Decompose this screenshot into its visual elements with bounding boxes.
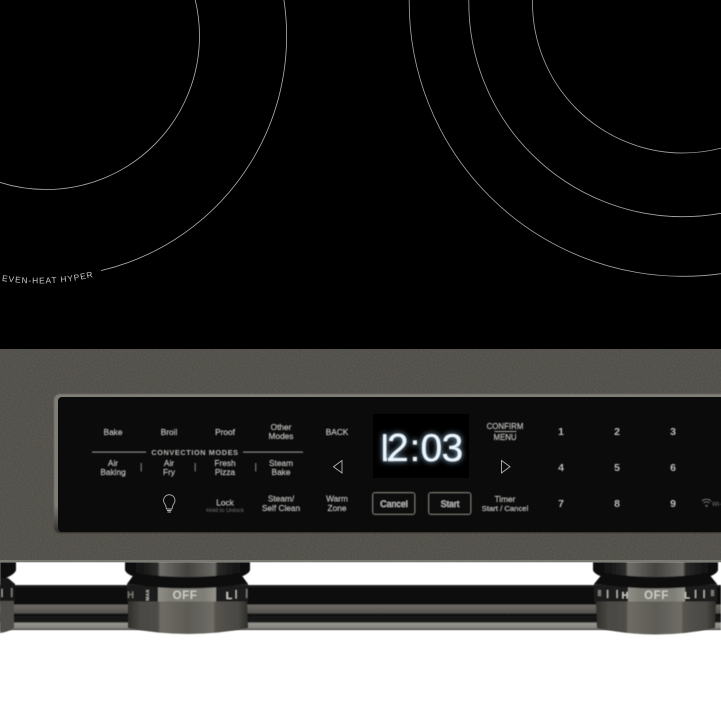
convection heading: CONVECTION MODES (151, 448, 239, 457)
knob: left: L (226, 590, 233, 602)
mode labels: Modes (269, 431, 293, 441)
knob collar (125, 562, 250, 577)
knob shadow band (594, 573, 717, 588)
top row: Bake (104, 427, 123, 437)
mode labels: Broil (161, 427, 177, 437)
burner label: EVEN-HEAT HYPER (2, 272, 93, 284)
mode labels: Bake (272, 467, 291, 477)
wi-fi indicator (702, 499, 721, 508)
mode labels: Pizza (215, 467, 236, 477)
cancel button (372, 492, 415, 514)
knob labels: OFF (173, 590, 197, 602)
knob labels: OFF (644, 590, 669, 602)
start button (428, 492, 471, 514)
cancel button: Cancel (380, 499, 408, 509)
knob dial ring (594, 584, 717, 602)
clock display: 12:03 (373, 427, 463, 470)
bottom row: Lock (216, 498, 235, 508)
left burner inner ring (0, 0, 200, 190)
left burner outer ring (101, 0, 287, 271)
number keypad: 6 (670, 462, 676, 474)
knob dial ring (127, 584, 248, 602)
left partial knob (0, 562, 16, 633)
confirm / menu (487, 422, 523, 442)
number keypad: 5 (614, 462, 620, 474)
mode labels: Steam/ (268, 494, 295, 504)
knob collar (593, 562, 718, 577)
start button: Start (441, 499, 460, 509)
icon: light bulb (164, 495, 175, 512)
number keypad: 3 (670, 426, 676, 438)
knob: right (593, 562, 718, 634)
mode labels: Self Clean (262, 503, 301, 513)
mode labels: Fry (163, 467, 176, 477)
cooktop glass surface (0, 0, 721, 349)
mode labels: Warm (326, 494, 348, 504)
number keypad: 8 (614, 498, 620, 510)
control panel (54, 394, 721, 533)
rail rods (0, 585, 721, 630)
mode labels: Hold to Unlock (206, 508, 244, 514)
mode labels: Other (271, 422, 292, 432)
convection row: Air (108, 458, 118, 468)
control band (0, 349, 721, 562)
number keypad: 2 (614, 426, 620, 438)
knob: left (125, 562, 250, 634)
number keypad: 7 (558, 498, 564, 510)
mode labels: BACK (326, 427, 349, 437)
knob: right: L (684, 590, 690, 602)
knob: left: H (127, 590, 134, 601)
mode labels: Fresh (214, 458, 236, 468)
number keypad (558, 426, 676, 510)
mode labels: Baking (100, 467, 126, 477)
knob body (596, 602, 716, 634)
mode labels: Steam (269, 458, 293, 468)
icon: forward arrow (502, 460, 510, 473)
number keypad: 4 (558, 462, 564, 474)
mode labels (92, 422, 349, 514)
knob: right: H (622, 590, 629, 602)
icon: back arrow (334, 460, 342, 473)
knob shadow band (127, 573, 248, 588)
knob body (128, 602, 248, 634)
right burner rings (409, 0, 721, 276)
number keypad: 1 (558, 426, 564, 438)
mode labels: Proof (215, 427, 236, 437)
number keypad: 9 (670, 498, 676, 510)
mode labels: Zone (328, 503, 347, 513)
timer label (482, 494, 529, 513)
confirm / menu: MENU (494, 433, 517, 442)
timer label: Timer (495, 494, 516, 504)
clock display (373, 414, 469, 478)
knob: left: MAX (145, 589, 151, 601)
mode labels: Air (164, 458, 174, 468)
timer label: Start / Cancel (482, 504, 529, 513)
confirm / menu: CONFIRM (487, 422, 523, 431)
